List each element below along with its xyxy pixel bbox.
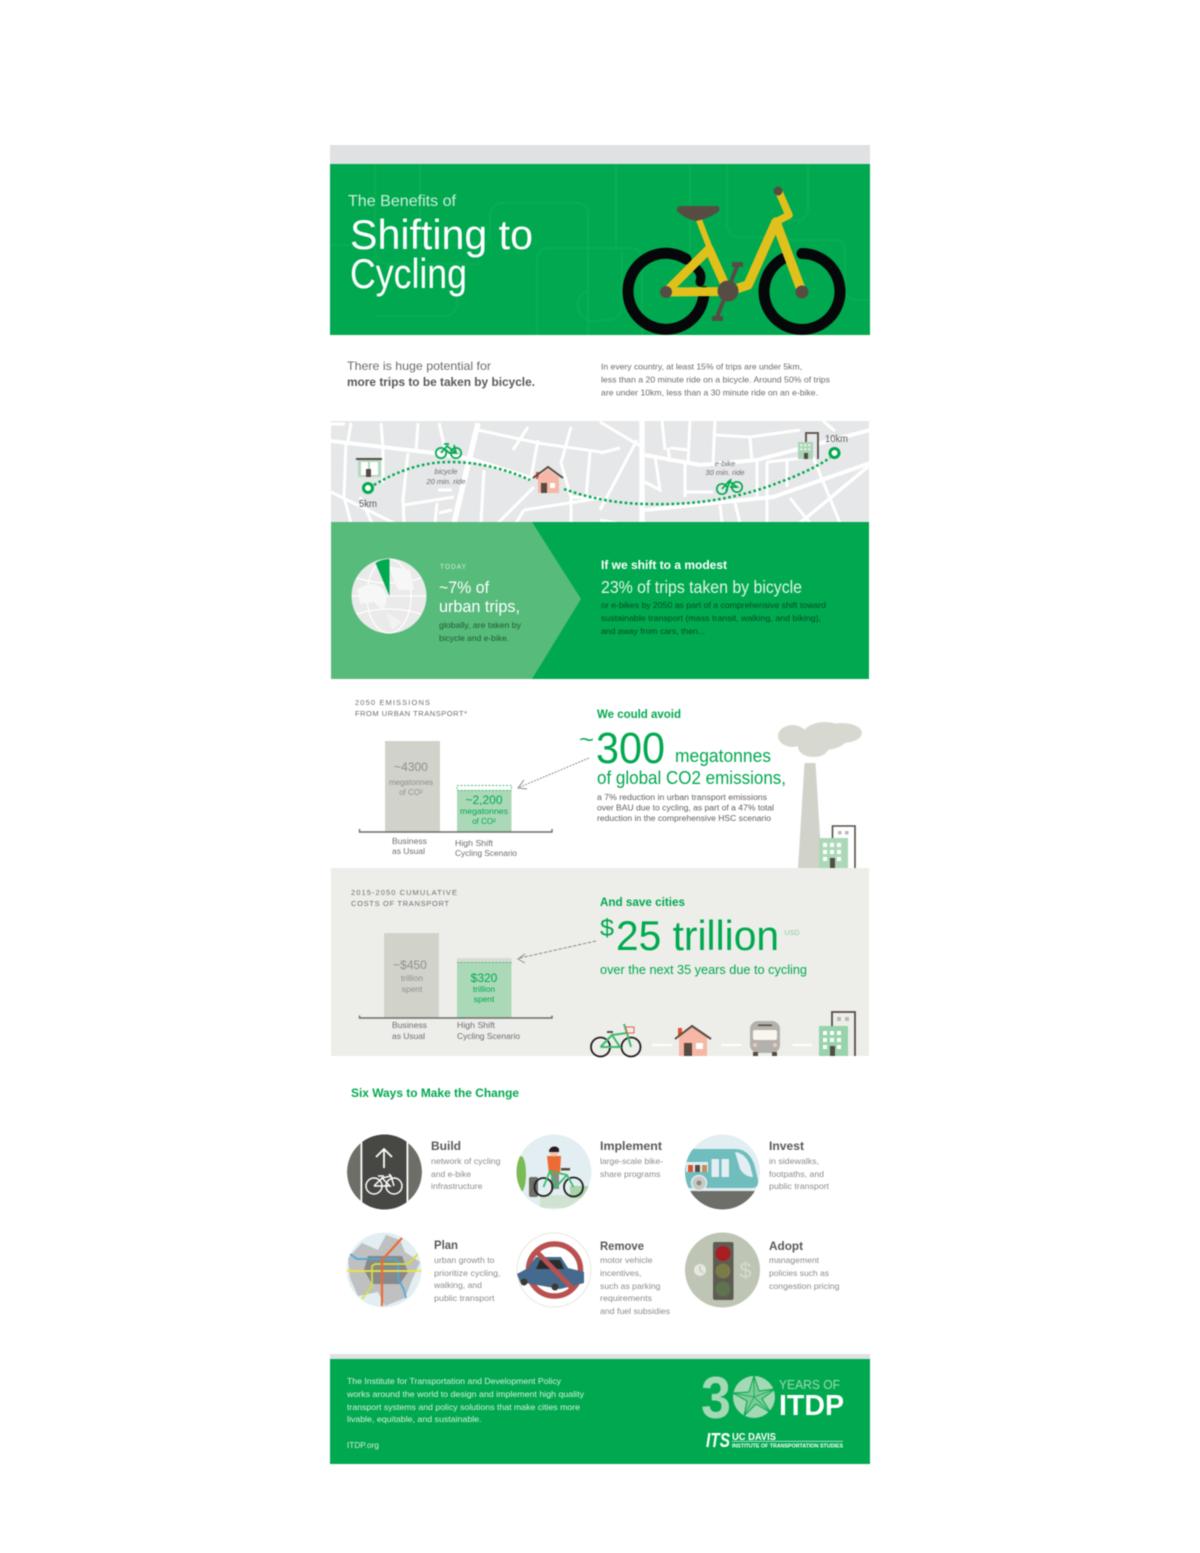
bar: business as usual: megatonnes <box>389 778 433 787</box>
icon: globe with pie wedge <box>352 558 426 634</box>
intro: huge potential: There is huge potential for <box>347 359 491 373</box>
callout: avoid 300 megatonnes: ~ <box>579 727 594 752</box>
icon: bicycle <box>436 444 461 458</box>
text: remove: such as parking <box>600 1281 661 1291</box>
bar: high shift: of CO² <box>472 817 496 826</box>
intro: trip distances: less than a 20 minute ride on a bicycle. Around 50% of trips <box>601 374 830 384</box>
stat: 7 percent <box>439 578 520 616</box>
text: implement: share programs <box>600 1169 660 1179</box>
today note <box>439 620 522 643</box>
axis labels: Cycling Scenario <box>457 1031 520 1041</box>
chart title: 2015-2050 CUMULATIVE <box>351 888 457 897</box>
title: Shifting to <box>350 211 533 258</box>
text: build: infrastructure <box>431 1181 483 1191</box>
icon: adopt: $ <box>739 1258 752 1283</box>
text: adopt: Adopt <box>769 1239 803 1253</box>
divider dash <box>722 1044 742 1046</box>
callout: avoid 300 megatonnes: megatonnes <box>675 746 771 766</box>
logo: 30 years of ITDP: ITDP <box>779 1390 844 1422</box>
callout: avoid 300 megatonnes: of global CO2 emissions, <box>597 768 786 788</box>
logo: 30 years of ITDP <box>701 1365 844 1431</box>
text: invest: in sidewalks, <box>769 1156 819 1166</box>
bar: business as usual: spent <box>402 984 423 994</box>
callout: avoid 300 megatonnes: 300 <box>596 724 665 773</box>
axis labels: High Shift <box>457 1020 496 1030</box>
icon: office building <box>819 1012 855 1056</box>
callout: save 25 trillion <box>600 897 807 977</box>
callout: avoid 300 megatonnes <box>579 709 786 823</box>
axis labels: Business <box>392 1020 427 1030</box>
text: invest: Invest <box>769 1139 804 1153</box>
bicycle label <box>425 467 466 486</box>
callout: save 25 trillion: USD <box>784 930 800 937</box>
intro: trip distances: are under 10km, less than a 30 minute ride on an e-bike. <box>601 388 818 398</box>
top grey band <box>330 145 870 164</box>
shift note: or e-bikes by 2050 as part of a comprehensive shift toward <box>601 600 826 610</box>
bar: high shift <box>457 958 512 1018</box>
bar: high shift: spent <box>474 994 495 1004</box>
divider dash <box>652 1044 672 1046</box>
text: adopt: policies such as <box>769 1268 829 1278</box>
arrow: emissions <box>518 758 589 789</box>
logo: ITS UC Davis <box>706 1430 843 1452</box>
icon: home <box>533 467 563 493</box>
text: remove: motor vehicle <box>600 1255 653 1265</box>
panel: today vs shift <box>331 522 869 679</box>
bar: business as usual: ~4300 <box>394 760 428 774</box>
city icons row <box>591 1012 855 1056</box>
text: adopt: management <box>769 1255 820 1265</box>
marker: 5km <box>359 484 377 510</box>
callout: avoid 300 megatonnes: over BAU due to cycling, as part of a 47% total <box>597 804 774 812</box>
panel: costs background <box>331 868 869 1056</box>
text: plan: Plan <box>434 1238 458 1252</box>
axis labels: Business <box>392 836 427 846</box>
bar: business as usual: trillion <box>401 973 423 983</box>
logo: ITS UC Davis: INSTITUTE OF TRANSPORTATION STUDIES <box>732 1444 843 1450</box>
text: plan: walking, and <box>433 1280 482 1290</box>
header panel <box>330 164 870 336</box>
text: adopt: congestion pricing <box>769 1281 840 1291</box>
marker: 10km: 10km <box>825 434 848 445</box>
background route pattern <box>330 164 870 336</box>
axis labels: as Usual <box>392 846 425 856</box>
intro: huge potential: more trips to be taken by bicycle. <box>347 375 535 389</box>
logo: 30 years of ITDP: 3 <box>701 1365 731 1431</box>
icon: green bicycle with basket <box>591 1024 640 1056</box>
text: build: and e-bike <box>431 1169 471 1179</box>
text: remove: Remove <box>600 1239 644 1253</box>
icon: adopt <box>685 1232 760 1308</box>
title: Cycling <box>350 250 467 297</box>
text: remove <box>600 1239 670 1316</box>
bar: business as usual <box>385 741 440 832</box>
icon: build <box>347 1130 422 1214</box>
logo: 30 years of ITDP: YEARS OF <box>779 1377 840 1392</box>
text: invest: public transport <box>769 1181 830 1191</box>
text: plan: public transport <box>434 1293 495 1303</box>
icon: office building <box>798 433 818 459</box>
today note: bicycle and e-bike. <box>439 633 509 643</box>
text: remove: incentives, <box>600 1268 642 1278</box>
text: implement: Implement <box>600 1139 662 1153</box>
icon: shop <box>356 458 382 477</box>
axis labels: as Usual <box>392 1031 425 1041</box>
text: invest <box>769 1139 830 1191</box>
callout: save 25 trillion: $ <box>600 915 614 942</box>
axis labels: High Shift <box>455 838 494 848</box>
axis <box>360 829 552 832</box>
text: plan: urban growth to <box>434 1255 495 1265</box>
about text: livable, equitable, and sustainable. <box>347 1414 482 1424</box>
today label: TODAY <box>440 564 467 571</box>
bar: high shift: $320 <box>471 971 498 985</box>
divider dash <box>792 1044 812 1046</box>
icon: yellow bicycle <box>628 186 840 330</box>
text: implement: large-scale bike- <box>600 1156 663 1166</box>
heading: six ways: Six Ways to Make the Change <box>351 1086 519 1100</box>
axis labels <box>392 836 517 858</box>
bicycle label: bicycle <box>435 467 457 476</box>
bar: high shift: megatonnes <box>460 807 508 816</box>
callout: avoid 300 megatonnes: reduction in the comprehensive HSC scenario <box>597 814 772 823</box>
chart: costs <box>351 888 552 1041</box>
about text: transport systems and policy solutions that make cities more <box>347 1402 580 1412</box>
icon: invest <box>684 1134 762 1211</box>
icon: implement <box>516 1134 592 1210</box>
marker: 5km: 5km <box>359 499 377 510</box>
about text: works around the world to design and implement high quality <box>346 1389 585 1399</box>
shift note: sustainable transport (mass transit, walking, and biking), <box>601 613 821 623</box>
shift note <box>601 600 826 636</box>
e-bike label <box>705 459 745 477</box>
icon: factory <box>778 722 862 868</box>
text: plan: prioritize cycling, <box>434 1268 500 1278</box>
stat: 7 percent: urban trips, <box>439 597 520 616</box>
bar: business as usual: of CO² <box>399 788 423 797</box>
intro: trip distances: In every country, at least 15% of trips are under 5km, <box>601 362 802 372</box>
logo: ITS UC Davis: ITS <box>706 1430 730 1452</box>
arrow: costs <box>518 941 596 963</box>
text: implement <box>600 1139 663 1179</box>
text: remove: and fuel subsidies <box>600 1306 670 1316</box>
chart title <box>351 888 457 908</box>
icon: bus <box>750 1021 780 1056</box>
text: build: Build <box>431 1139 461 1153</box>
about text: ITDP.org <box>347 1440 379 1450</box>
light green arrow panel <box>331 522 581 679</box>
bar: high shift: trillion <box>473 984 495 994</box>
e-bike route <box>564 458 830 504</box>
axis labels: Cycling Scenario <box>455 848 517 858</box>
chart title <box>355 698 467 718</box>
text: remove: requirements <box>600 1293 652 1303</box>
bar: business as usual <box>384 933 439 1018</box>
chart: emissions <box>355 698 552 858</box>
bar: high shift: ~2,200 <box>465 793 503 807</box>
callout: save 25 trillion: And save cities <box>600 897 685 909</box>
title <box>348 193 533 297</box>
axis <box>360 1016 552 1018</box>
icon: e-bike <box>717 479 742 494</box>
text: build: network of cycling <box>431 1156 501 1166</box>
about text <box>346 1376 585 1450</box>
bar: business as usual: ~$450 <box>393 958 427 972</box>
street map with routes <box>331 420 870 523</box>
bicycle route <box>374 462 530 485</box>
footer <box>330 1354 870 1464</box>
callout: avoid 300 megatonnes: We could avoid <box>597 709 681 721</box>
text: adopt <box>769 1239 840 1291</box>
icon: plan <box>346 1232 422 1308</box>
today note: globally, are taken by <box>439 620 522 630</box>
intro: huge potential <box>347 359 535 389</box>
text: plan <box>433 1238 500 1303</box>
stat: 7 percent: ~7% of <box>439 578 489 597</box>
axis labels <box>392 1020 520 1041</box>
e-bike label: e-bike <box>715 459 735 468</box>
chart title: COSTS OF TRANSPORT <box>351 899 449 908</box>
callout: save 25 trillion: 25 trillion <box>616 912 779 959</box>
shift heading: If we shift to a modest <box>601 560 727 572</box>
chart title: FROM URBAN TRANSPORT* <box>355 709 467 718</box>
title: The Benefits of <box>348 193 457 210</box>
shift note: and away from cars, then... <box>601 626 705 636</box>
marker: 10km <box>825 434 848 458</box>
logo: ITS UC Davis: UC DAVIS <box>732 1432 776 1443</box>
e-bike label: 30 min. ride <box>705 468 745 477</box>
about text: The Institute for Transportation and Development Policy <box>347 1376 562 1386</box>
text: invest: footpaths, and <box>769 1169 824 1179</box>
text: build <box>431 1139 501 1191</box>
icon: home <box>675 1026 711 1056</box>
stat: 23 percent: 23% of trips taken by bicycle <box>601 577 802 597</box>
callout: avoid 300 megatonnes: a 7% reduction in urban transport emissions <box>597 793 767 802</box>
intro: trip distances <box>601 362 830 398</box>
bar: high shift <box>457 786 512 832</box>
chart title: 2050 EMISSIONS <box>355 698 430 707</box>
icon: remove <box>517 1233 591 1307</box>
callout: save 25 trillion: over the next 35 years due to cycling <box>600 962 807 977</box>
bicycle label: 20 min. ride <box>425 477 466 486</box>
